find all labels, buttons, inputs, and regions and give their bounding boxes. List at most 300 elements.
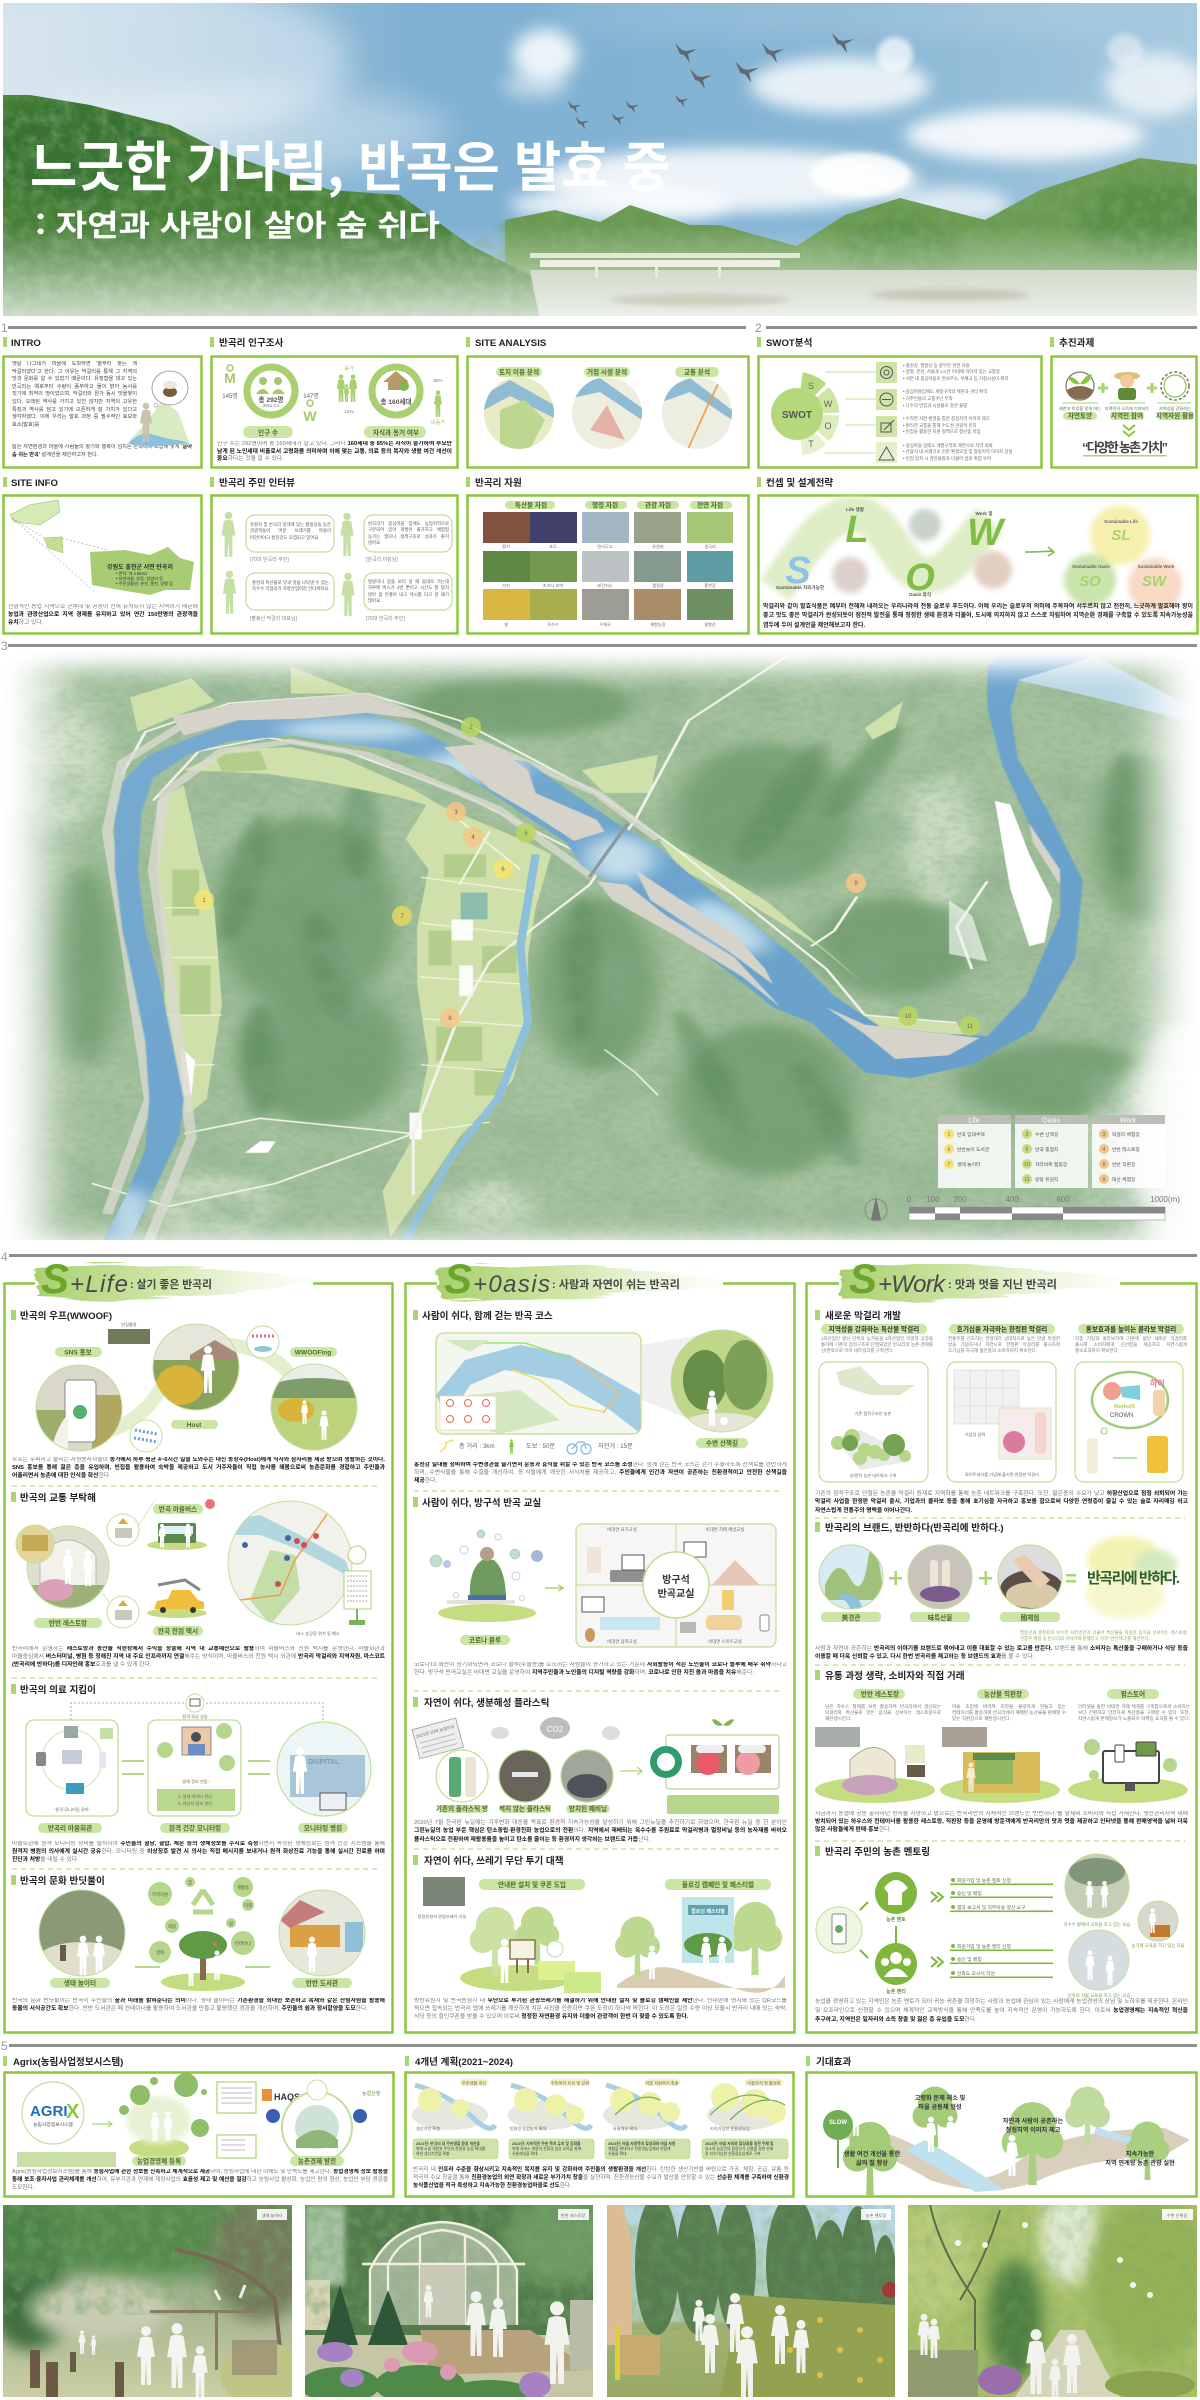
map: land use bbox=[484, 377, 554, 449]
SWOT text bbox=[903, 362, 1012, 462]
recycle and resource tree: 희망 bbox=[168, 1923, 176, 1930]
old man on bench bbox=[430, 1530, 543, 1622]
phase notes: 위해 시설 개량과 주민과 친환경 농업 확대를 bbox=[416, 2146, 486, 2151]
banner: S+Life: S bbox=[41, 1255, 69, 1302]
box: limited bbox=[947, 1362, 1056, 1482]
label: plogging bbox=[665, 1879, 771, 1890]
label: playground bbox=[50, 1978, 110, 1988]
heading: walking course: 사람이 쉬다, 함께 걷는 반곡 코스 bbox=[422, 1310, 553, 1322]
chart: population ring: M bbox=[224, 370, 236, 386]
photo: vacant house: 빈집활용 bbox=[121, 1321, 137, 1328]
silhouettes bbox=[222, 512, 355, 616]
effect 3: 청정지역 이미지 제고 bbox=[1006, 2126, 1061, 2134]
panel: effects bbox=[806, 2072, 1196, 2196]
ring: host bbox=[153, 1324, 239, 1410]
course map bbox=[436, 1333, 641, 1434]
ring bbox=[998, 1545, 1062, 1609]
mentee list: 만족도 조사서 작성 bbox=[957, 1970, 995, 1977]
label: restaurant bbox=[34, 1618, 102, 1628]
task labels: 제한과 토양을 알게 하는 bbox=[1059, 405, 1101, 412]
legend: 수변 산책길 bbox=[1035, 1131, 1058, 1138]
photo captions: 딸기 bbox=[502, 543, 510, 550]
photo captions bbox=[1064, 1921, 1185, 1999]
scene: container bbox=[940, 1727, 1060, 1803]
map markers: 11 bbox=[967, 1024, 974, 1030]
text: traffic: 반곡리에서 운영하는 레스토랑과 농산물 직판장에서 수익을 창출해 지역 내 교통예산으로 활용하여 마을버스와 천원 택시를 운영한다. 마을회관과 마을중심에서 버스터미널, 병원 등 정해진 지역 내 주요 인프라까지 연결해주는 방식이며, 마을버스와 천원 택시 외관에 반곡리 막걸리와 지역자원, 마스코트(반곡리에 반하다)를 디자인해 홍보효과를 낼 수 있게 한다. bbox=[12, 1646, 385, 1668]
underlines bbox=[1062, 402, 1191, 404]
map markers: 3 bbox=[454, 810, 458, 816]
scene: greenhouse bbox=[815, 1727, 935, 1803]
icon: strength bbox=[876, 362, 897, 383]
recycle and resource tree: 생태 bbox=[156, 1949, 164, 1956]
silhouettes bbox=[851, 2101, 1018, 2176]
site master plan map bbox=[0, 636, 1200, 1268]
SWOT text: • 편리한 교통을 통해 수도권 관광객 유치 bbox=[903, 422, 976, 429]
venn text: Sustainable Oasis bbox=[1072, 564, 1110, 569]
legend: 9 bbox=[1103, 1177, 1106, 1183]
photo circles bbox=[1065, 1854, 1178, 1990]
map: location bbox=[10, 500, 194, 595]
legend: Life bbox=[968, 1118, 980, 1124]
chart: household ring: 총 160세대 bbox=[380, 397, 412, 406]
partner logos bbox=[262, 2089, 381, 2123]
label: trail: 수변 산책길 bbox=[706, 1438, 738, 1448]
photo tag: 농촌 멘토링 bbox=[866, 2212, 886, 2218]
panel: population survey bbox=[212, 356, 458, 468]
icon: threat bbox=[876, 442, 897, 463]
mentor icon bbox=[875, 1872, 917, 1923]
connector lines bbox=[825, 372, 876, 453]
label: population bbox=[243, 426, 293, 438]
captions: [70대 반곡리 주민] bbox=[366, 615, 405, 622]
scale bar: 1000(m) bbox=[1150, 1195, 1180, 1204]
phase notes: 품 지속가능한 친환경농업체로 구축 bbox=[705, 2151, 761, 2156]
course stats: 총 거리 : 3km bbox=[459, 1442, 495, 1450]
SWOT text: • 다수의 빈집과 시설물로 경관 불량 bbox=[903, 402, 967, 409]
effect 4 bbox=[1105, 2150, 1175, 2167]
birds bbox=[568, 33, 854, 129]
banner: S+Life bbox=[35, 1255, 313, 1302]
intro text: 옛날 나그네가 마을에 도착하면 '술부터 찾는 게 막걸리였다'고 한다. 그 이유는 막걸리를 통해 그 지역의 맛과 문화를 알 수 있었기 때문이다. 유장함을 대고 있는 반곡리는 예로부터 수량이 풍부하고 물이 맑아 농사를 짓기에 최적의 땅이었으며, 막걸리와 뭔가 동시 맛을쌓이 있다. 오래된 역사를 가지고 있진 않지만 지역의 고유한 특징과 역사를 담고 있기에 오픈하게 잘 가치가 있다고 생각하였다. 이에 우리는 발효 과정 중 필수적인 효모와 효소(발효)를 bbox=[12, 361, 137, 428]
photo captions: 옥수수 밭에서 교육을 하고 있는 모습 bbox=[1064, 1921, 1130, 1928]
label: farm store bbox=[1107, 1689, 1159, 1699]
label: household: 자식과 동거 여부 bbox=[373, 428, 419, 437]
newspaper bbox=[412, 1718, 463, 1759]
text: plan: 반곡리 내 인프라 수준을 향상시키고 지속적인 복지를 유지 및 강화하여 주민들의 생활환경을 개선한다. 탄탄한 생산기반을 바탕으로 가공, 체험, 공급, 유통 등 적극적 수요 창출을 통해 친환경농업의 외연 확장과 새로운 부가가치 창출을 실현하며, 친환경농산물 수요가 발산을 안정할 수 있는 선순환 체계를 구축하여 신환경 농식품산업을 적극 육성하고 지속가능한 친환경농업마을로 선도한다. bbox=[413, 2167, 789, 2189]
recycle and resource tree: 컨테이너 bbox=[235, 1940, 251, 1947]
banner: S+Oasis: +0asis bbox=[473, 1271, 550, 1298]
panel: site analysis bbox=[468, 356, 748, 468]
pins bbox=[205, 1499, 215, 1509]
ring: SNS bbox=[36, 1365, 122, 1451]
circle: library bbox=[279, 1890, 365, 1976]
photo captions: 보건지소 bbox=[597, 582, 613, 589]
slogan underline bbox=[1083, 455, 1167, 456]
icon: weakness bbox=[876, 389, 897, 410]
phase notes: 2022년: 지속적인 주민 복지 유지 및 강화를 bbox=[512, 2141, 581, 2146]
legend: 막걸리 체험장 bbox=[1112, 1131, 1140, 1138]
recycle and resource tree: 재활용 bbox=[237, 1884, 249, 1891]
phase 2023: 유통채널 확대 bbox=[613, 2125, 637, 2132]
photo captions: 면사무소 bbox=[597, 543, 613, 550]
label: population: 인구 수 bbox=[258, 428, 278, 437]
effect 1: 생활 여건 개선을 통한 bbox=[844, 2150, 901, 2158]
legend bbox=[938, 1115, 1165, 1188]
dist text 1: 남은 하우스 철제를 보완 활용하여 반곡리에서 생산되는 막걸리와 특산물로 만든 음식을 선보이는 레스토랑으로 재탄생시킨다. bbox=[825, 1704, 941, 1721]
text: classroom: 코로나19 확산이 장기화되면서 코로나 블루(우울증)를 호소하는 사람들이 증가하고 있는 가운데 사회활동이 적은 노인들이 코로나 블루에 매우 취약하다고 한다. 방구석 반곡교실은 비대면 교실을 운영하여 지역주민들과 노인들의 디지털 역량을 강화하며, 코로나로 인한 지친 몸과 마음을 치유해준다. bbox=[414, 1662, 787, 1676]
course stats bbox=[440, 1439, 633, 1454]
map: location: • 면적: 약 4.8km2 bbox=[116, 570, 148, 577]
course map border bbox=[436, 1333, 641, 1434]
arrow bbox=[92, 2121, 112, 2127]
bio badge bbox=[650, 1746, 682, 1778]
venn text: SO bbox=[1079, 573, 1101, 590]
newspaper: 2021년 10대 농정이슈 bbox=[415, 1723, 455, 1740]
ring: wwoofing bbox=[271, 1364, 357, 1450]
concept labels: Sustainable 지속가능한 bbox=[776, 584, 825, 591]
intro text bottom: 닮은 자연환경과 마을에 사람들의 활기와 행복이 넘치는 반곡리의 모습에 맞게 '살아 숨 쉬는 반곡' 설계안을 제안하고자 한다. bbox=[12, 444, 192, 458]
phase 2022: 주민복지 유지 및 강화 bbox=[551, 2080, 589, 2086]
photo: litter: 방탕유원지 관광쓰레기 유실 bbox=[418, 1913, 466, 1920]
legend: Oasis bbox=[1042, 1118, 1060, 1124]
captions: [팔봉산 막걸리 대표님] bbox=[250, 615, 298, 622]
room grid: 비대면 스마트교실 bbox=[708, 1638, 742, 1645]
phase 2021: 생산기반 확충 bbox=[416, 2125, 440, 2132]
course stats: 자전거 : 15분 bbox=[598, 1442, 633, 1450]
chart: SWOT wheel: O bbox=[824, 421, 832, 431]
label: land use bbox=[496, 367, 542, 377]
photo captions: 팔봉산 bbox=[704, 621, 716, 627]
photo: vacant house bbox=[108, 1321, 150, 1344]
chevrons bbox=[931, 1892, 943, 1967]
map markers: 2 bbox=[469, 725, 473, 731]
text: WWOOF: 우프는 우퍼라고 불리는 자원봉사자들이 농가에서 하루 평균 4~6시간 일을 도와주는 대신 농장주(Host)에게 식사와 잠자리를 제공 받으며 생활하는 것이다. SNS 홍보를 통해 젊은 층을 유입하며, 빈집을 활용하여 숙박을 제공하고 도시 거주자들이 직접 농사를 해봄으로써 농촌문화를 경험하고 주민들과 어울리면서 농촌에 대한 인식을 확산한다. bbox=[12, 1457, 385, 1479]
mentor list bbox=[950, 1877, 1053, 1912]
heading: WWOOF: 반곡의 우프(WWOOF) bbox=[20, 1310, 112, 1322]
venn text bbox=[1072, 519, 1175, 590]
panel: SWOT bbox=[758, 356, 1042, 468]
photo captions: 쌀 bbox=[504, 621, 508, 627]
banner: S+Life: : 살기 좋은 반곡리 bbox=[130, 1277, 212, 1291]
paint splash bbox=[1085, 1536, 1177, 1619]
phase notes: 유통을 확대 bbox=[608, 2151, 627, 2156]
recycle and resource tree: 미래 bbox=[244, 1902, 252, 1909]
trees bbox=[843, 2087, 1169, 2195]
panel: interviews bbox=[212, 496, 458, 634]
dist text 2: 마을 초입에 버려져 미관을 불량하게 만들고 있는 컨테이너를 활용하여 반곡리에서 재배된 농산물을 판매할 수 있는 직판장으로 재탄생시킨다. bbox=[952, 1704, 1066, 1721]
photo captions: 우체국 bbox=[599, 621, 611, 628]
label: hall: 반곡리 마을회관 bbox=[48, 1824, 92, 1832]
map markers: 8 bbox=[448, 1016, 452, 1022]
heading: SWOT: SWOT분석 bbox=[766, 338, 812, 349]
map: location: • 자연마을: 방동, 방양리 등 bbox=[116, 575, 163, 582]
path and river bbox=[825, 2124, 1190, 2192]
photo: rural mentoring bbox=[607, 2195, 898, 2397]
heading: traffic: 반곡의 교통 부탁해 bbox=[20, 1492, 96, 1504]
room grid: 비대면 요가교실 bbox=[607, 1526, 637, 1533]
brand logo text: 반곡리에 반하다. bbox=[1087, 1570, 1180, 1587]
effect 4: 지속가능한 bbox=[1126, 2150, 1155, 2158]
heading: site info: SITE INFO bbox=[11, 478, 58, 489]
phase notes: 위해 서비스 개발과 친환경 생산 교육을 통해 bbox=[512, 2146, 582, 2151]
effect 2: 고령화 문제 해소 및 bbox=[915, 2094, 966, 2102]
chart: population ring: 147명 bbox=[303, 392, 319, 400]
text: mentoring: 농업을 경영하고 있는 지역민은 농촌 멘토가 되어 귀농·귀촌을 희망하는 사람과 농업에 관심이 있는 사람에게 농업경영의 상담 및 노하우를 제공한다. 온라인 및 오프라인으로 신청할 수 있으며 체계적인 교육방식을 통해 만족도를 높여 지속적인 운영이 가능하도록 한다. 이로써 농업경영체는 지속적인 혁신을 추구하고, 지역민은 일자리와 소득 창출 및 젊은 층 유입을 도모한다. bbox=[815, 1999, 1188, 2023]
box: collab: CROWN bbox=[1110, 1413, 1133, 1419]
map markers: 10 bbox=[905, 1014, 912, 1020]
labels: 천연 자원 bbox=[697, 500, 723, 510]
photo: waterside trail bbox=[895, 2185, 1200, 2399]
center badge: 방구석 bbox=[662, 1573, 690, 1586]
heading: makgeolli: 새로운 막걸리 개발 bbox=[825, 1310, 901, 1322]
legend: 생태 놀이터 bbox=[957, 1161, 980, 1168]
heading: bioplastic: 자연이 쉬다, 생분해성 플라스틱 bbox=[424, 1697, 549, 1709]
mentor list: 회원가입 및 농촌 멘토 신청 bbox=[957, 1877, 1011, 1884]
swoosh bbox=[775, 514, 990, 590]
note box bbox=[17, 2152, 116, 2167]
effect 1 bbox=[844, 2150, 901, 2167]
label: hospital: 모니터링 병원 bbox=[304, 1824, 342, 1832]
heading: population: 반곡리 인구조사 bbox=[219, 337, 284, 349]
map markers: 9 bbox=[854, 881, 858, 887]
photo captions: 캠핑장 bbox=[652, 582, 664, 588]
label: beauty: 美경관 bbox=[842, 1613, 860, 1622]
label: restaurant: 반반 레스토랑 bbox=[49, 1618, 87, 1628]
label: settlement: 거점 시설 분석 bbox=[587, 368, 627, 376]
bus bbox=[147, 1523, 207, 1550]
label: settlement bbox=[584, 367, 630, 377]
slow sign: SLOW bbox=[829, 2120, 847, 2126]
heading: effects: 기대효과 bbox=[816, 2056, 851, 2068]
SLOW letters: O bbox=[905, 557, 935, 599]
heading: mentoring: 반곡리 주민의 농촌 멘토링 bbox=[825, 1846, 930, 1858]
subhead 2 bbox=[949, 1324, 1055, 1334]
box: health monitoring: 1. 생체 데이터 관리 bbox=[178, 1793, 212, 1800]
wwoof link swoosh bbox=[60, 1345, 300, 1435]
speech bubble 4: 병원이나 장을 보러 갈 때 읍내로 가는데 하루에 버스가 4번 뿐이고 시간도 잘 맞지 않아 몸 안좋아 내고 택시를 타고 갈 때가 많아요. bbox=[368, 579, 449, 603]
mentee list bbox=[950, 1943, 1053, 1978]
room grid: 비대면 음악교실 bbox=[607, 1638, 637, 1645]
resource photos bbox=[483, 512, 733, 620]
text: distribution: 지금까지 농협에 공동 출하하던 방식을 지양하고 앞으로는 반곡리만의 자체적인 브랜드인 '반반하다.'를 앞세워 소비자와 직접 거래한다. 생산관리지역 내에 방치되어 있는 하우스와 컨테이너를 활용한 레스토랑, 직판장 등을 운영해 방문객에게 반곡리만의 맛과 멋을 제공하고 인터넷을 통해 판매영역을 넓혀 더욱 많은 사람들에게 판매·홍보한다. bbox=[815, 1811, 1188, 1833]
circle: eco playground bbox=[37, 1890, 127, 1978]
banner: S+Work: +Work bbox=[878, 1271, 947, 1298]
room grid bbox=[576, 1524, 776, 1647]
mentor list: 결과 보고서 및 직무비용 정산 요구 bbox=[957, 1904, 1026, 1911]
heading: INTRO: INTRO bbox=[11, 338, 41, 349]
label: land use: 토지 이용 분석 bbox=[499, 368, 539, 376]
heading: litter: 자연이 쉬다, 쓰레기 무단 투기 대책 bbox=[424, 1855, 564, 1867]
label: Host: Host bbox=[187, 1422, 202, 1429]
room grid: 비대면 치매 예방교실 bbox=[706, 1526, 744, 1533]
arrow bbox=[620, 1767, 642, 1775]
venn text: Sustainable Work bbox=[1138, 564, 1175, 569]
task labels bbox=[1059, 405, 1194, 420]
label: fermentation: 醱체험 bbox=[1021, 1613, 1039, 1622]
effect 2 bbox=[915, 2094, 966, 2111]
legend: 방탕 유원지 bbox=[1035, 1176, 1058, 1183]
phase 2023: 마을 자원복지 확충 bbox=[645, 2080, 679, 2086]
section marker 3: 3 bbox=[1, 639, 8, 653]
map markers bbox=[194, 717, 980, 1036]
panel: S+Life bbox=[4, 1255, 392, 2032]
labels: plastic: 기존의 플라스틱 병 bbox=[436, 1804, 488, 1813]
photo tag: 수변 산책길 bbox=[1167, 2212, 1187, 2219]
label: restaurant: 반반 레스토랑 bbox=[861, 1690, 899, 1698]
scale bar: 0 bbox=[907, 1195, 912, 1204]
arrows bbox=[860, 1902, 896, 1958]
text: medical: 마을회관에 원격 모니터링 장비를 설치하여 주민들의 혈당, 혈압, 체온 등의 생체정보를 수시로 측정하면서 측정된 생체정보는 원격 건강 시스템을 통해 원격지 병원의 의사에게 실시간 공유한다. 모니터링 중 이상징후 발견 시 의사는 직접 메시지를 보내거나 원격 화상진료 기능을 통해 실시간 진료를 하며 진단과 처방을 내릴 수 있다. bbox=[12, 1841, 385, 1863]
bus timetable bbox=[344, 1546, 371, 1625]
label: library: 반반 도서관 bbox=[306, 1978, 338, 1988]
sub text 2: 전통주를 선호하는 연령대가 상대적으로 높은 만큼 특정한 날을 기념하거나 자연으로 한정판 막걸리를 출시하여 호기심을 자극해 젊은층의 소비자까지 확보한다. bbox=[948, 1336, 1060, 1353]
SLOW letters bbox=[785, 509, 1006, 599]
legend: 11 bbox=[1024, 1177, 1030, 1183]
map markers: 5 bbox=[524, 831, 528, 837]
label: hall bbox=[38, 1823, 102, 1833]
left scene: signage bbox=[460, 1906, 601, 1993]
speech bubble 4 bbox=[364, 573, 452, 610]
phase 2024 bbox=[707, 2079, 786, 2132]
ring: hospital bbox=[277, 1722, 371, 1816]
phase boxes bbox=[413, 2139, 788, 2159]
photo captions: 포도 bbox=[549, 544, 557, 549]
section marker 2: 2 bbox=[755, 321, 762, 335]
chart: population ring: W bbox=[303, 408, 317, 424]
concept labels bbox=[776, 506, 992, 598]
mentor list: 승인 및 매칭 bbox=[957, 1890, 982, 1897]
chart: SWOT wheel: S bbox=[808, 381, 814, 391]
no-go signs bbox=[440, 1396, 496, 1430]
legend: 2 bbox=[1026, 1132, 1029, 1138]
chart: population ring bbox=[222, 365, 319, 424]
text: bioplastic: 2020년 7월 한국판 뉴딜에는 기후변화 대응을 목표로 환경적 지속가능성을 달성하기 위해 그린뉴딜을 추진하기로 하였으며, 한국판 뉴딜 중 한 분야인 그린뉴딜의 농업 부문 핵심은 탄소중립·환경친화 농업으로의 전환이다. 지역에서 재배되는 옥수수를 주원료로 막걸리병과 멀칭비닐 등의 농자재를 바이오 플라스틱으로 전환하여 재활용률을 높이고 탄소를 줄이는 등 환경까지 생각하는 브랜드로 거듭난다. bbox=[414, 1820, 787, 1843]
CO2 clouds bbox=[491, 1717, 620, 1740]
ring: playground bbox=[39, 1890, 125, 1976]
labels: plastic bbox=[436, 1804, 610, 1813]
photo tag bbox=[1162, 2209, 1193, 2220]
partner logos: 농협은행 bbox=[362, 2090, 381, 2097]
legend: Work bbox=[1120, 1118, 1137, 1124]
ring: library bbox=[279, 1890, 365, 1976]
text: makgeolli: 기존의 점적구조로 단절된 농촌을 막걸리 원재료 지역화를 통해 농촌 네트워크를 구축한다. 또한, 젊은층의 수요가 낮고 하향산업으로 점점 쇠퇴되어 가는 막걸리 사업을 한정판 막걸리 출시, 기업과의 콜라보 등을 통해 호기심을 자극하고 홍보를 함으로써 다양한 연령층이 즐길 수 있는 술로 자리매김 하고 자연스럽게 전통주의 명맥을 이어나간다. bbox=[815, 1491, 1188, 1514]
panel: resources bbox=[468, 496, 748, 634]
sub text 1: 1차산업인 생산 단위의 농가들을 2차산업인 막걸리 공장을 통하여 기존의 점적구조로 단절되었던 반곡리의 농촌 경제를 선/면적으로 이어 네트워크를 구축한다. bbox=[821, 1336, 933, 1353]
heading: concept: 컨셉 및 설계전략 bbox=[766, 477, 833, 489]
phase 2024: 지속가능한 친환경농업 bbox=[710, 2125, 750, 2132]
label: sign: 안내판 설치 및 쿠폰 도입 bbox=[498, 1880, 566, 1889]
SWOT text: • 중심마을임에도 개발구역의 제한과 관리 취약 bbox=[903, 388, 987, 395]
phase 2023 bbox=[603, 2079, 686, 2132]
box: monitoring devices: -원격 모니터링 장비- bbox=[54, 1806, 91, 1813]
recycle and resource tree: 지역자원 bbox=[152, 1891, 168, 1898]
legend: 7 bbox=[948, 1162, 951, 1168]
scale bar bbox=[907, 1195, 1180, 1220]
circle: bus map bbox=[228, 1501, 352, 1625]
phase notes: 2023년: 마을 자원복지 활성화와 마을 자원 bbox=[608, 2141, 676, 2146]
photo captions: 옥수수 bbox=[547, 622, 559, 628]
venn blobs bbox=[1064, 505, 1182, 612]
circle: greenhouse restaurant bbox=[27, 1526, 109, 1608]
SLOW letters: W bbox=[967, 512, 1006, 554]
rural economy circle bbox=[282, 2080, 352, 2162]
legend: 자라바위 캠핑장 bbox=[1035, 1161, 1068, 1168]
photo tag: 생태 놀이터 bbox=[262, 2212, 282, 2219]
label: taxi: 반곡 천원 택시 bbox=[158, 1626, 198, 1636]
right scene: plogging bbox=[615, 1897, 785, 1993]
effect 1: 삶의 질 향상 bbox=[856, 2159, 888, 2167]
icon: farmer bbox=[1114, 372, 1140, 400]
icon: traveller with thought bubble bbox=[128, 371, 190, 447]
legend: 8 bbox=[1103, 1162, 1106, 1168]
operators bbox=[889, 1571, 1076, 1585]
dist text 3: 인터넷을 통한 비대면 거래 체계를 구축함으로써 소비자는 보다 간편하고 안전하게 특산품을 구매할 수 있다. 또한, 자연스럽게 판매정보가 노출되어 마케팅 효과를 볼 수 있다. bbox=[1078, 1704, 1190, 1721]
mentee icon bbox=[875, 1943, 917, 1995]
mentor icon: 농촌 멘토 bbox=[886, 1916, 906, 1923]
task labels: 자연토양 bbox=[1068, 411, 1092, 420]
captions bbox=[250, 556, 405, 622]
course stats: 도보 : 50분 bbox=[526, 1443, 555, 1450]
recycle and resource tree bbox=[135, 1877, 270, 1991]
label: shop: 농산물 직판장 bbox=[984, 1690, 1022, 1698]
label: shop bbox=[977, 1689, 1029, 1699]
speech bubble 1 bbox=[246, 515, 334, 552]
label: SNS: SNS 홍보 bbox=[64, 1348, 92, 1356]
label: traffic bbox=[675, 367, 719, 377]
heading: interviews: 반곡리 주민 인터뷰 bbox=[219, 477, 295, 489]
phase 2021 bbox=[412, 2079, 495, 2132]
venn text: SL bbox=[1111, 527, 1131, 544]
captions: [70대 반곡리 주민] bbox=[250, 556, 289, 563]
banner: S+Work bbox=[839, 1255, 1120, 1302]
legend: 3 bbox=[1103, 1132, 1106, 1138]
label: taste bbox=[910, 1612, 970, 1622]
concept labels: Work 일 bbox=[976, 510, 992, 516]
phase notes: 위한 생산기반을 확충 bbox=[416, 2151, 450, 2156]
label: taste: 味특산물 bbox=[928, 1613, 952, 1622]
label: trail bbox=[696, 1438, 748, 1448]
label: WWOOFing bbox=[290, 1347, 337, 1357]
slow sign bbox=[823, 2110, 853, 2168]
task labels: 지역민 참여 bbox=[1111, 411, 1143, 420]
document boxes bbox=[217, 2082, 256, 2158]
labels bbox=[505, 500, 732, 510]
photo: litter bbox=[418, 1877, 466, 1920]
phase 2024: 마을자치 및 활성화 bbox=[747, 2080, 781, 2086]
logo circle: 농림사업정보시스템 bbox=[33, 2121, 73, 2128]
subhead 3 bbox=[1078, 1324, 1184, 1334]
circle: hospital: DISPITAL bbox=[308, 1759, 340, 1766]
concept text: 막걸리와 같이 발효식품은 예부터 전해져 내려오는 우리나라의 전통 슬로우 푸드이다. 이에 우리는 슬로우의 의미에 주목하여 서두르지 않고 천천히, 느긋하게 발효해야 향이 좋고 맛도 좋은 막걸리가 완성되듯이 점진적 발전을 통해 청정한 생태 환경과 더불어, 도시에 의지하지 않고 스스로 자립하여 지역순환 경제를 구축할 수 있도록 지속가능성을 염두에 두어 설계안을 제안해보고자 한다. bbox=[763, 604, 1193, 629]
section marker 5: 5 bbox=[1, 2039, 8, 2053]
heading: culture: 반곡의 문화 반딧불이 bbox=[20, 1875, 105, 1887]
CO2 clouds: CO2 bbox=[547, 1725, 564, 1734]
map: location: 강원도 홍천군 서면 반곡리 bbox=[107, 563, 173, 571]
banner: S+Work: : 맛과 멋을 지닌 반곡리 bbox=[948, 1277, 1057, 1291]
panel: site info bbox=[4, 496, 202, 634]
photo: restaurant bbox=[300, 2195, 615, 2400]
label: restaurant bbox=[853, 1689, 905, 1699]
concept labels: Oasis 휴식 bbox=[909, 591, 931, 598]
map markers: 6 bbox=[501, 867, 505, 873]
banner: S+Life: +Life bbox=[70, 1271, 128, 1298]
legend: 5 bbox=[1026, 1147, 1029, 1153]
heading: site analysis: SITE ANALYSIS bbox=[475, 338, 547, 349]
chevrons bbox=[1123, 425, 1135, 436]
chart: population ring: 2021.4.1 bbox=[263, 403, 280, 408]
legend: 10 bbox=[1024, 1162, 1030, 1168]
center badge: 반곡교실 bbox=[658, 1587, 694, 1600]
